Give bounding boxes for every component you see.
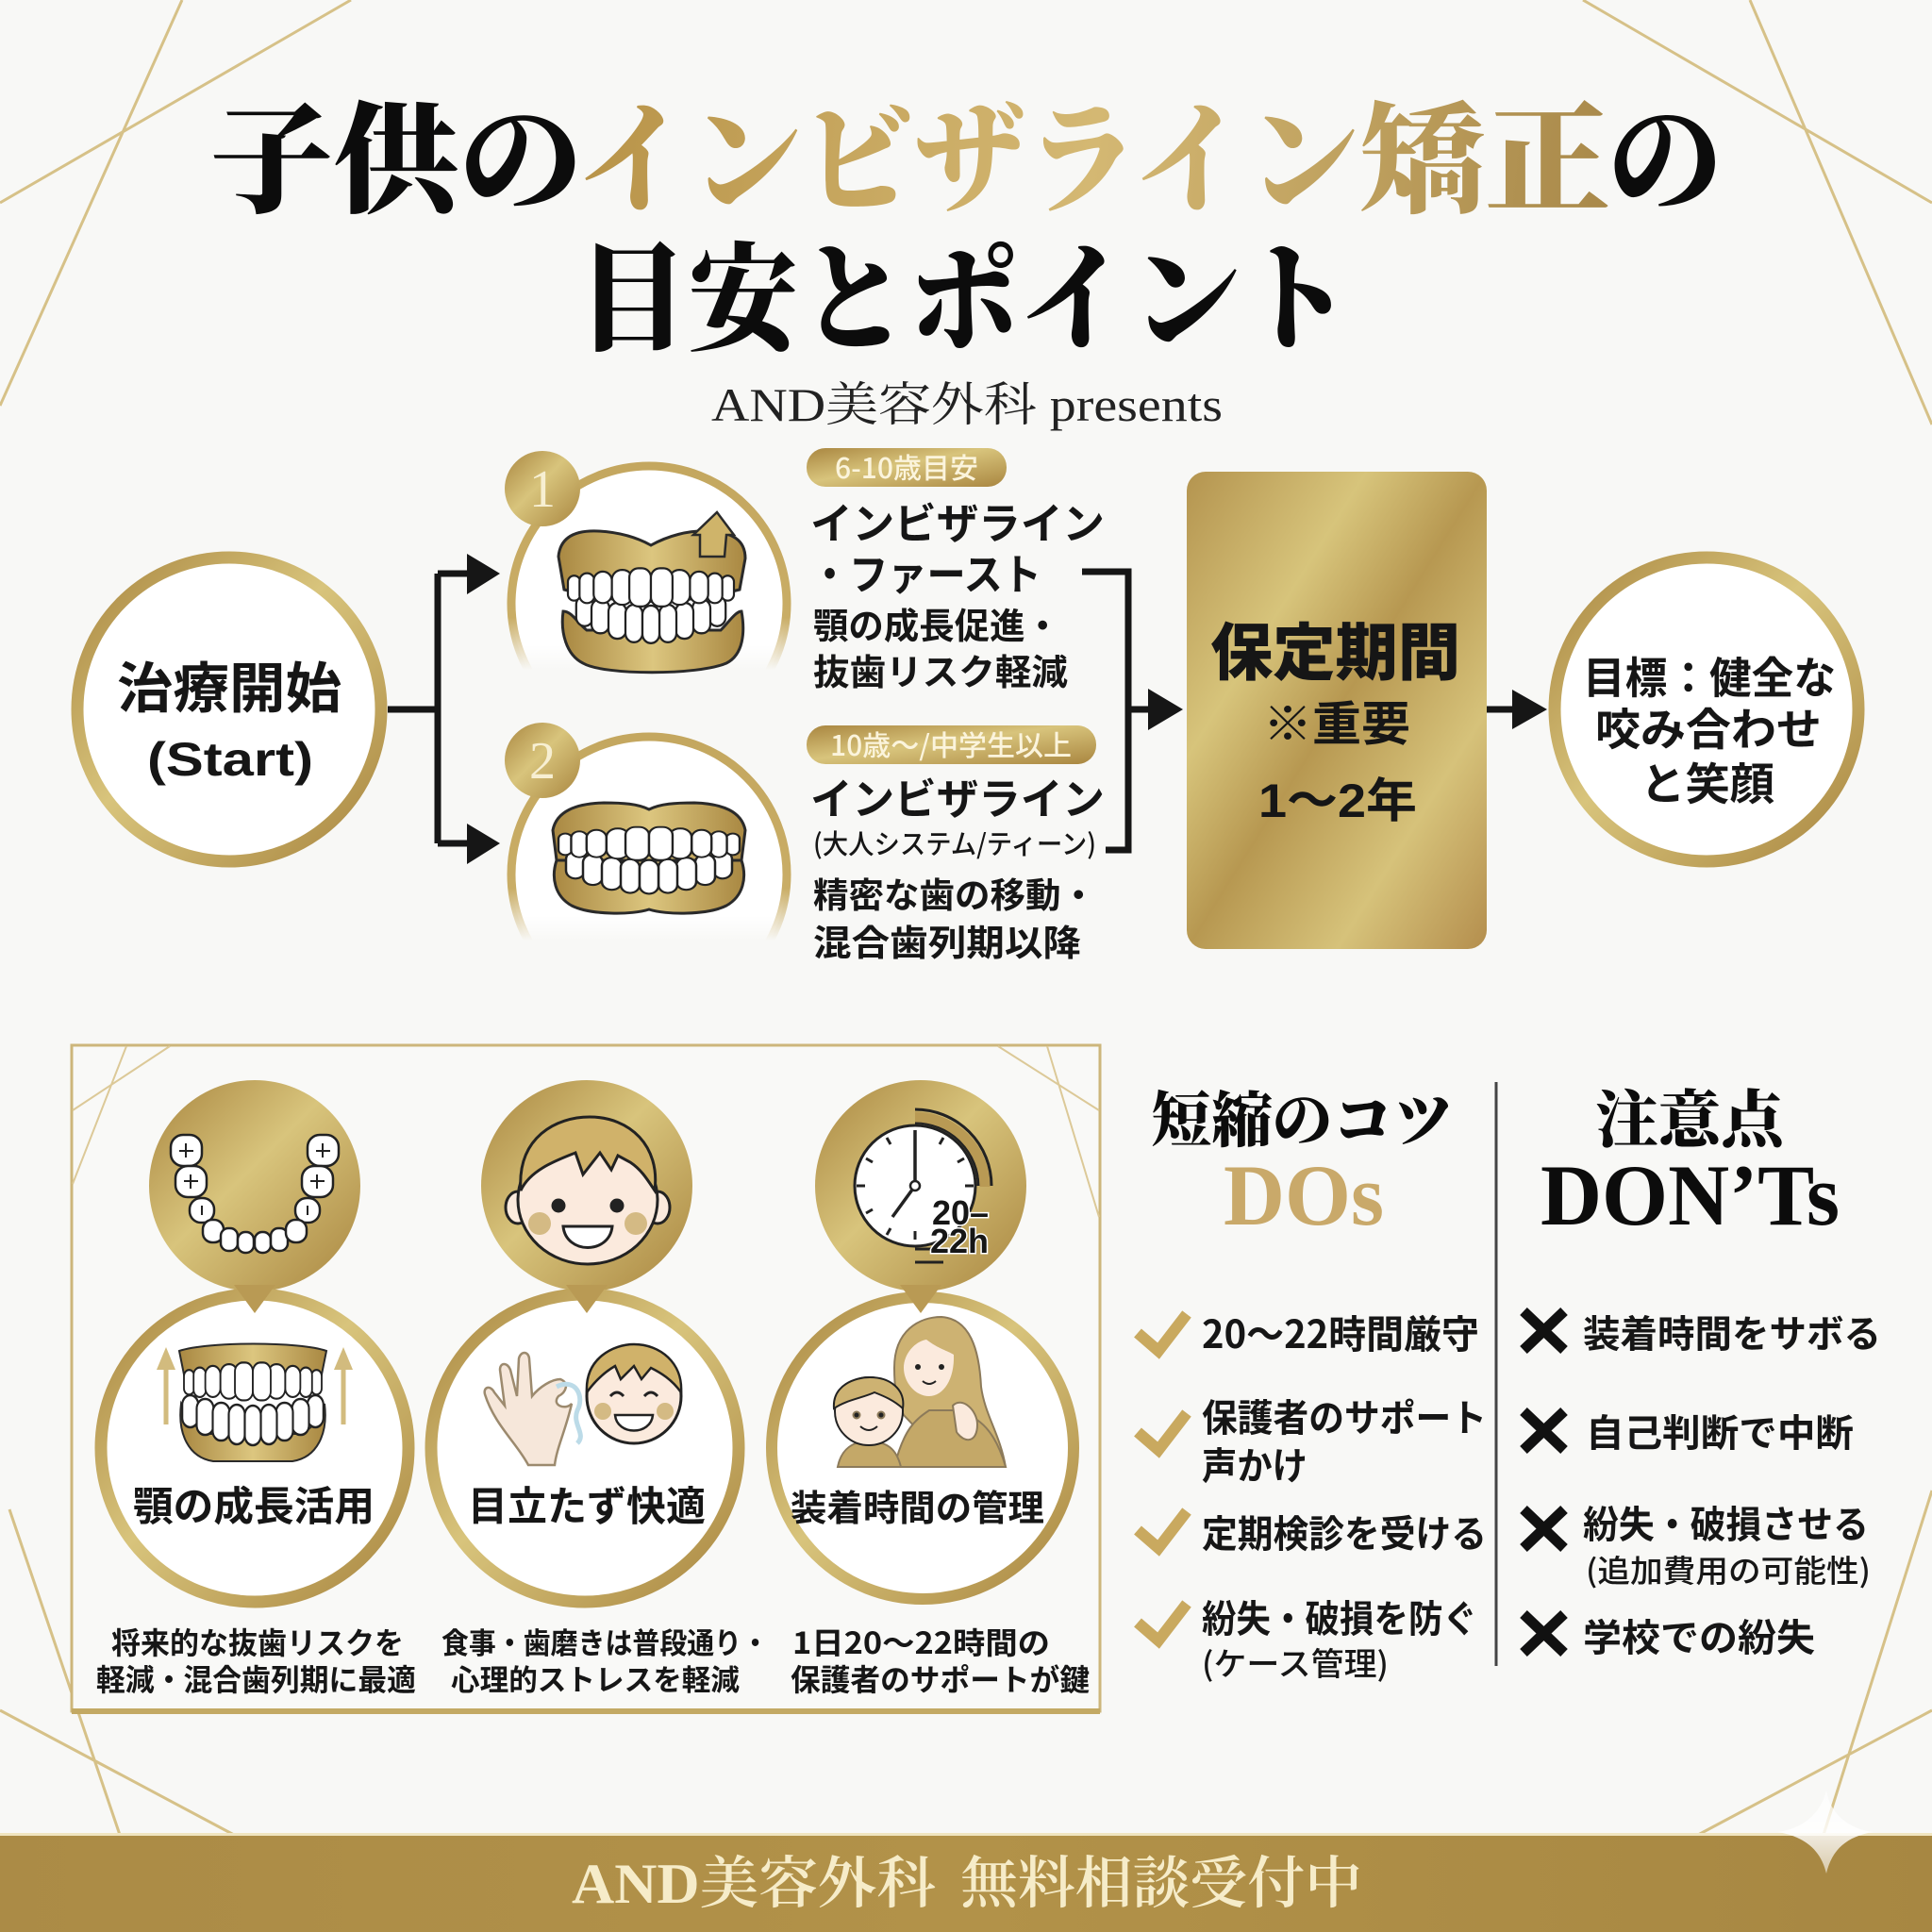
footer banner: AND美容外科 <box>572 1853 936 1915</box>
goal circle: 咬み合わせ <box>1595 693 1822 758</box>
step 1 text: 6-10歳目安 <box>835 445 978 487</box>
DOs list: 紛失・破損を防ぐ <box>1202 1589 1477 1643</box>
goal circle <box>1555 558 1858 861</box>
step 2 text: 精密な歯の移動・ <box>813 867 1096 918</box>
footer banner: 無料相談受付中 <box>960 1839 1362 1920</box>
DON'Ts list: 紛失・破損させる <box>1583 1494 1869 1549</box>
feature column 1: jaw growth: 将来的な抜歯リスクを <box>111 1620 404 1663</box>
feature column 1: jaw growth <box>96 1080 416 1700</box>
step 1 text: 抜歯リスク軽減 <box>813 643 1068 695</box>
icon: sparkle <box>1778 1790 1873 1874</box>
DOs list: (ケース管理) <box>1202 1639 1389 1685</box>
feature column 2: inconspicuous and comfortable: 食事・歯磨きは普段通り・ <box>441 1620 769 1662</box>
icon: clock 20-22h <box>855 1109 991 1262</box>
feature column 3: wear time: 装着時間の管理 <box>791 1479 1044 1531</box>
DOs list: 定期検診を受ける <box>1202 1504 1487 1558</box>
DOs list: 声かけ <box>1202 1436 1307 1491</box>
step 2 icon: full teeth <box>505 723 787 1012</box>
DOs list: 保護者のサポート <box>1202 1388 1487 1442</box>
icon: mother and child <box>834 1317 1006 1467</box>
icon: hand with aligner and child <box>485 1344 681 1465</box>
step 2 text: インビザライン <box>810 765 1105 826</box>
footer banner <box>0 1833 1932 1932</box>
step 2 text: 混合歯列期以降 <box>813 914 1081 966</box>
feature column 2: inconspicuous and comfortable: 心理的ストレスを軽減 <box>451 1657 740 1699</box>
DOs heading <box>1151 1073 1454 1243</box>
DON'Ts heading: DON’Ts <box>1541 1147 1840 1243</box>
step 1 icon: growing jaw: 1 <box>529 460 556 519</box>
feature column 3: wear time: 保護者のサポートが鍵 <box>791 1657 1090 1700</box>
feature column 1: jaw growth: 軽減・混合歯列期に最適 <box>96 1657 416 1700</box>
title: の <box>1607 64 1723 238</box>
DON'Ts list <box>1524 1304 1881 1662</box>
step 1 text: インビザライン <box>810 490 1105 551</box>
panel: benefits <box>72 1045 1100 1711</box>
title: 子供の <box>209 64 583 238</box>
feature column 1: jaw growth: 顎の成長活用 <box>133 1474 375 1533</box>
start circle <box>77 558 381 861</box>
DOs heading: 短縮のコツ <box>1151 1073 1454 1159</box>
feature column 3: wear time <box>772 1080 1090 1700</box>
retention period card: ※重要 <box>1263 687 1410 755</box>
feature column 3: wear time: 1日20〜22時間の <box>792 1620 1050 1663</box>
step 1 text <box>807 445 1105 695</box>
title: 目安とポイント <box>577 207 1351 375</box>
retention period card: 1〜2年 <box>1258 774 1417 827</box>
title <box>209 64 1723 375</box>
step 2 text: 10歳〜/中学生以上 <box>830 723 1072 764</box>
step 2 icon: full teeth: 2 <box>529 732 556 791</box>
DOs list <box>1138 1303 1487 1685</box>
icon: dental arch <box>171 1135 339 1253</box>
title: インビザライン <box>577 64 1358 238</box>
DON'Ts list: 自己判断で中断 <box>1586 1403 1854 1457</box>
step 1 text: 顎の成長促進・ <box>813 597 1060 649</box>
step 2 text: (大人システム/ティーン) <box>813 823 1096 862</box>
step 1 text: ・ファースト <box>810 541 1041 602</box>
step 2 text <box>807 723 1105 966</box>
icon: jaw with arrows <box>157 1343 353 1461</box>
feature column 2: inconspicuous and comfortable: 目立たず快適 <box>468 1474 706 1533</box>
goal circle: 目標：健全な <box>1583 644 1836 707</box>
DON'Ts heading: 注意点 <box>1595 1070 1790 1159</box>
DOs heading: DOs <box>1224 1147 1384 1243</box>
feature column 2: inconspicuous and comfortable <box>431 1080 769 1699</box>
DON'Ts list: (追加費用の可能性) <box>1586 1546 1871 1591</box>
start circle: (Start) <box>147 733 313 786</box>
step 1 icon: growing jaw <box>505 451 787 741</box>
icon: clock 20-22h: 20– <box>932 1193 989 1232</box>
DON'Ts list: 装着時間をサボる <box>1583 1304 1881 1358</box>
retention period card <box>1187 472 1487 949</box>
DON'Ts list: 学校での紛失 <box>1583 1607 1815 1662</box>
DON'Ts heading <box>1541 1070 1840 1243</box>
icon: smiling child face <box>506 1117 670 1264</box>
DOs list: 20〜22時間厳守 <box>1202 1303 1479 1359</box>
title: 矯正 <box>1358 64 1611 238</box>
retention period card: 保定期間 <box>1210 603 1460 693</box>
flow connectors and arrows <box>388 554 1547 864</box>
start circle: 治療開始 <box>117 644 341 724</box>
icon: clock 20-22h: 22h <box>930 1222 989 1260</box>
goal circle: と笑顔 <box>1641 748 1774 813</box>
subtitle: AND美容外科 presents <box>711 378 1223 431</box>
